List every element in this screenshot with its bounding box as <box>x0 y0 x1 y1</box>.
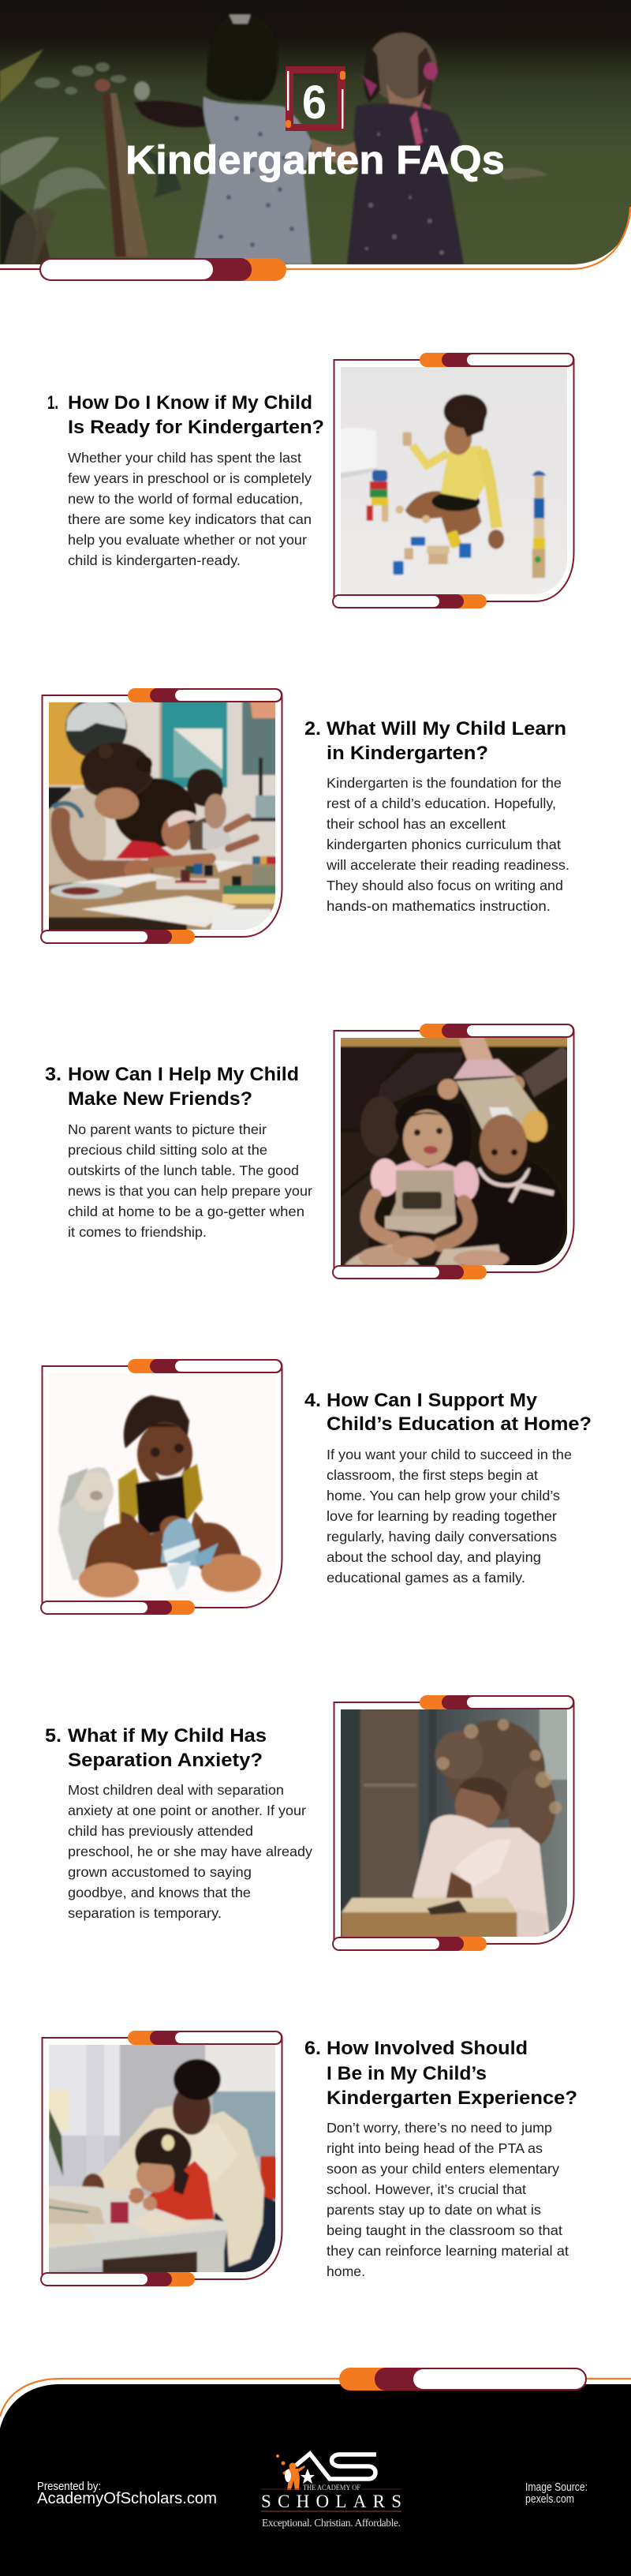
body text 5 <box>68 1782 312 1921</box>
top pill 5 <box>420 1695 574 1709</box>
heading 5: Separation Anxiety? <box>68 1750 263 1771</box>
body text 6 <box>327 2120 569 2279</box>
body text 3: it comes to friendship. <box>68 1224 207 1240</box>
photo 6: father helping daughter draw <box>45 2041 279 2276</box>
photo 1: toddler playing with blocks <box>338 365 569 597</box>
frame 3 <box>334 1030 574 1272</box>
body text 5: Most children deal with separation <box>68 1782 284 1798</box>
footer pill decoration <box>339 2368 587 2391</box>
academy of scholars logo <box>261 2454 401 2529</box>
body text 1 <box>68 450 312 568</box>
body text 5: goodbye, and knows that the <box>68 1885 251 1900</box>
bottom pill 3 <box>332 1265 487 1279</box>
body text 2: will accelerate their reading readiness. <box>326 857 569 873</box>
hero accent line <box>284 207 630 269</box>
heading 2: What Will My Child Learn <box>327 718 566 739</box>
badge: number 6 <box>286 66 345 131</box>
heading 4: Child’s Education at Home? <box>327 1413 592 1435</box>
frame 5 <box>334 1702 574 1944</box>
heading 4: 4. <box>304 1390 321 1411</box>
heading 1: 1. <box>47 392 58 414</box>
top pill 4 <box>128 1359 282 1373</box>
body text 1: Whether your child has spent the last <box>68 450 301 466</box>
body text 2: hands-on mathematics instruction. <box>327 898 551 914</box>
panel 3: question three <box>45 1024 574 1279</box>
logo mark AS <box>296 2454 376 2479</box>
body text 4: regularly, having daily conversations <box>327 1529 557 1544</box>
logo lines <box>261 2488 401 2490</box>
photo 5: girl opening a cardboard box <box>338 1707 569 1939</box>
body text 6: they can reinforce learning material at <box>327 2243 569 2259</box>
body text 2: their school has an excellent <box>327 816 506 832</box>
body text 2: kindergarten phonics curriculum that <box>327 837 561 852</box>
photo 3: two girls on a leather sofa <box>341 1038 567 1265</box>
heading 1 <box>47 392 324 438</box>
panel 5: question five <box>45 1695 574 1951</box>
digit 6: 6 <box>302 76 327 129</box>
logo underline <box>261 2510 401 2512</box>
bottom pill 6 <box>40 2272 195 2286</box>
body text 3: news is that you can help prepare your <box>68 1183 312 1199</box>
body text 4: classroom, the first steps begin at <box>327 1467 538 1483</box>
logo name: THE ACADEMY OF <box>303 2484 360 2492</box>
body text 4: home. You can help grow your child’s <box>327 1488 560 1503</box>
heading 2: 2. <box>304 718 321 739</box>
photo 4: smiling girl with stuffed toys <box>57 1394 263 1599</box>
body text 1: there are some key indicators that can <box>68 511 312 527</box>
body text 6: school. However, it’s crucial that <box>327 2181 526 2197</box>
body text 3: outskirts of the lunch table. The good <box>68 1163 299 1178</box>
footer black panel <box>0 2384 631 2576</box>
logo wordmark: SCHOLARS <box>261 2492 401 2511</box>
body text 5: grown accustomed to saying <box>68 1864 252 1880</box>
body text 3 <box>68 1121 312 1240</box>
body text 4: about the school day, and playing <box>327 1549 541 1565</box>
heading 5 <box>45 1725 267 1771</box>
panel 4: question four <box>40 1359 592 1615</box>
body text 3: child at home to be a go-getter when <box>68 1204 304 1219</box>
heading 3: Make New Friends? <box>68 1088 252 1110</box>
heading 6: I Be in My Child’s <box>327 2063 487 2084</box>
body text 6: home. <box>327 2263 365 2279</box>
panel 1: question one <box>47 353 574 608</box>
heading 3: How Can I Help My Child <box>68 1064 299 1085</box>
top pill 2 <box>128 688 282 702</box>
bottom pill 5 <box>332 1937 487 1951</box>
body text 6: right into being head of the PTA as <box>327 2140 543 2156</box>
panel 2: question two <box>40 688 569 944</box>
heading 2: in Kindergarten? <box>327 743 488 764</box>
heading 6 <box>304 2038 577 2109</box>
main title: Kindergarten FAQs <box>125 137 505 182</box>
logo tagline: Exceptional. Christian. Affordable. <box>262 2517 401 2529</box>
body text 4: love for learning by reading together <box>327 1508 557 1524</box>
footer accent line <box>0 2379 631 2417</box>
frame 2 <box>43 695 282 937</box>
body text 5: child has previously attended <box>68 1823 253 1839</box>
body text 4: If you want your child to succeed in the <box>327 1447 572 1462</box>
bottom pill 4 <box>40 1601 195 1615</box>
heading 6: Kindergarten Experience? <box>327 2087 577 2109</box>
heading 3 <box>45 1064 299 1110</box>
body text 1: help you evaluate whether or not your <box>68 532 307 548</box>
heading 5: 5. <box>45 1725 62 1747</box>
heading 4 <box>304 1390 592 1435</box>
hero accent line left segment <box>0 268 47 270</box>
heading 1: Is Ready for Kindergarten? <box>68 417 324 438</box>
body text 3: precious child sitting solo at the <box>68 1142 267 1158</box>
body text 1: new to the world of formal education, <box>68 491 303 507</box>
panel 6: question six <box>40 2031 577 2286</box>
image source credit <box>525 2481 588 2506</box>
bottom pill 1 <box>332 594 487 608</box>
body text 3: No parent wants to picture their <box>68 1121 267 1137</box>
photo 2: children painting at a table <box>45 697 279 934</box>
presented by credit: AcademyOfScholars.com <box>37 2489 217 2507</box>
heading 6: How Involved Should <box>327 2038 528 2059</box>
presented by credit: Presented by: <box>37 2480 101 2493</box>
body text 6: parents stay up to date on what is <box>327 2202 541 2218</box>
body text 1: few years in preschool or is completely <box>68 470 312 486</box>
body text 4 <box>327 1447 572 1586</box>
frame 1 <box>334 359 574 601</box>
heading 4: How Can I Support My <box>327 1390 538 1411</box>
hero banner photo: two girls walking in a garden <box>0 0 631 268</box>
bottom pill 2 <box>40 930 195 944</box>
body text 2: They should also focus on writing and <box>327 878 563 893</box>
body text 6: Don’t worry, there’s no need to jump <box>327 2120 552 2136</box>
heading 1: How Do I Know if My Child <box>68 392 312 414</box>
body text 2 <box>326 775 569 914</box>
hero pill decoration <box>39 258 286 281</box>
logo figure with stars <box>276 2454 305 2490</box>
presented by credit <box>37 2480 217 2507</box>
image source credit: Image Source: <box>525 2481 588 2494</box>
heading 3: 3. <box>45 1064 62 1085</box>
body text 4: educational games as a family. <box>327 1570 525 1586</box>
body text 5: anxiety at one point or another. If your <box>68 1803 306 1818</box>
body text 6: being taught in the classroom so that <box>327 2222 562 2238</box>
heading 6: 6. <box>304 2038 321 2059</box>
heading 5: What if My Child Has <box>68 1725 267 1747</box>
body text 1: child is kindergarten-ready. <box>68 552 241 568</box>
frame 4 <box>43 1365 282 1608</box>
body text 5: separation is temporary. <box>68 1905 222 1921</box>
top pill 1 <box>420 353 574 367</box>
body text 2: rest of a child’s education. Hopefully, <box>327 796 556 811</box>
heading 2 <box>304 718 566 764</box>
frame 6 <box>43 2037 282 2279</box>
top pill 3 <box>420 1024 574 1038</box>
body text 6: soon as your child enters elementary <box>327 2161 559 2177</box>
image source credit: pexels.com <box>525 2493 574 2506</box>
top pill 6 <box>128 2031 282 2045</box>
body text 2: Kindergarten is the foundation for the <box>327 775 562 791</box>
body text 5: preschool, he or she may have already <box>68 1844 312 1859</box>
